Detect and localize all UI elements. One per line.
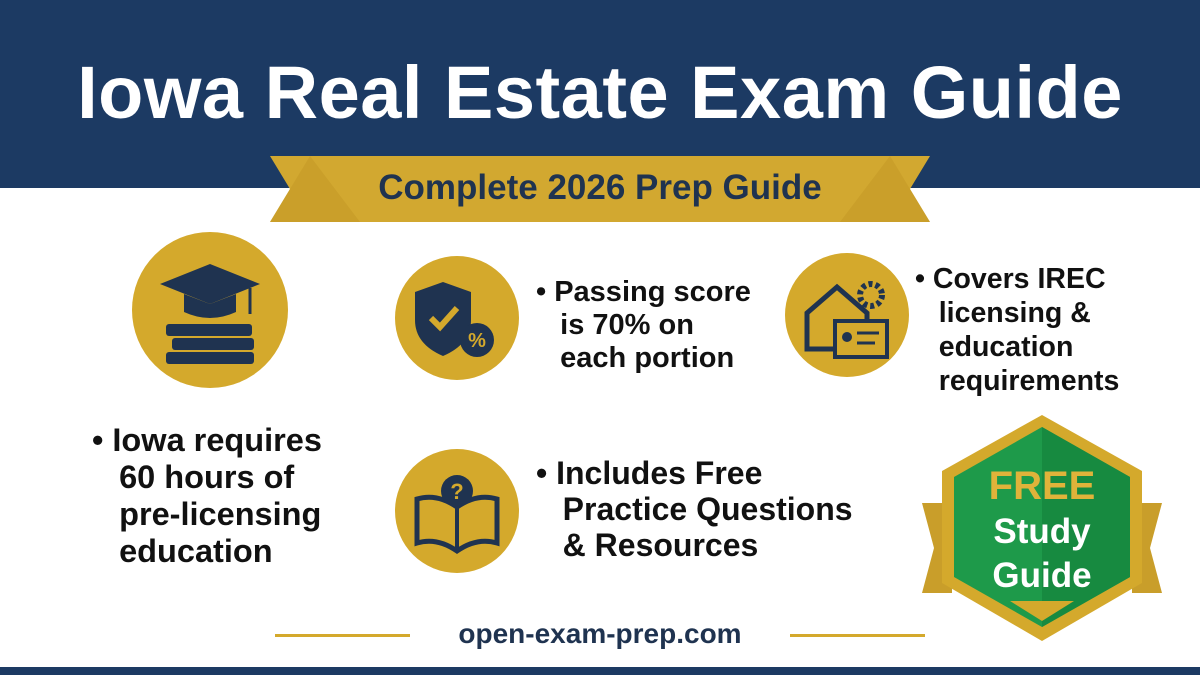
badge: free study guide: Guide bbox=[992, 556, 1092, 595]
text: Iowa requires: 60 hours of bbox=[119, 459, 294, 495]
text: Iowa requires: • Iowa requires bbox=[92, 422, 322, 458]
banner: subtitle bbox=[270, 156, 930, 222]
badge: free study guide: Study bbox=[993, 512, 1091, 551]
icon: book with question: ? bbox=[450, 479, 464, 504]
text: Iowa requires: pre-licensing bbox=[119, 496, 321, 532]
text: includes free bbox=[536, 455, 853, 563]
text: covers IREC: requirements bbox=[939, 365, 1119, 397]
icon: shield with check: % bbox=[468, 330, 486, 352]
text: covers IREC: licensing & bbox=[939, 297, 1091, 329]
badge: free study guide bbox=[922, 415, 1162, 641]
text: passing score: is 70% on bbox=[560, 309, 694, 341]
text: covers IREC: • Covers IREC bbox=[915, 263, 1106, 295]
icon: house and certificate bbox=[785, 253, 909, 377]
text: Iowa requires: education bbox=[119, 533, 273, 569]
text: passing score: • Passing score bbox=[536, 276, 751, 308]
text: includes free: & Resources bbox=[563, 527, 758, 563]
text: includes free: • Includes Free bbox=[536, 455, 762, 491]
header band bbox=[0, 0, 1200, 188]
text: passing score bbox=[536, 276, 751, 374]
icon: graduation cap bbox=[132, 232, 288, 388]
text: Iowa requires bbox=[92, 422, 322, 569]
banner: subtitle: Complete 2026 Prep Guide bbox=[378, 168, 822, 207]
text: covers IREC: education bbox=[939, 331, 1073, 363]
text: covers IREC bbox=[915, 263, 1119, 397]
icon: shield with check bbox=[395, 256, 519, 380]
footer url bbox=[275, 618, 925, 649]
text: passing score: each portion bbox=[560, 342, 734, 374]
bottom bar bbox=[0, 667, 1200, 675]
badge: free study guide: FREE bbox=[989, 464, 1095, 508]
title: Iowa Real Estate Exam Guide bbox=[77, 51, 1123, 134]
footer url: open-exam-prep.com bbox=[458, 618, 742, 649]
text: includes free: Practice Questions bbox=[563, 491, 853, 527]
icon: book with question bbox=[395, 449, 519, 573]
